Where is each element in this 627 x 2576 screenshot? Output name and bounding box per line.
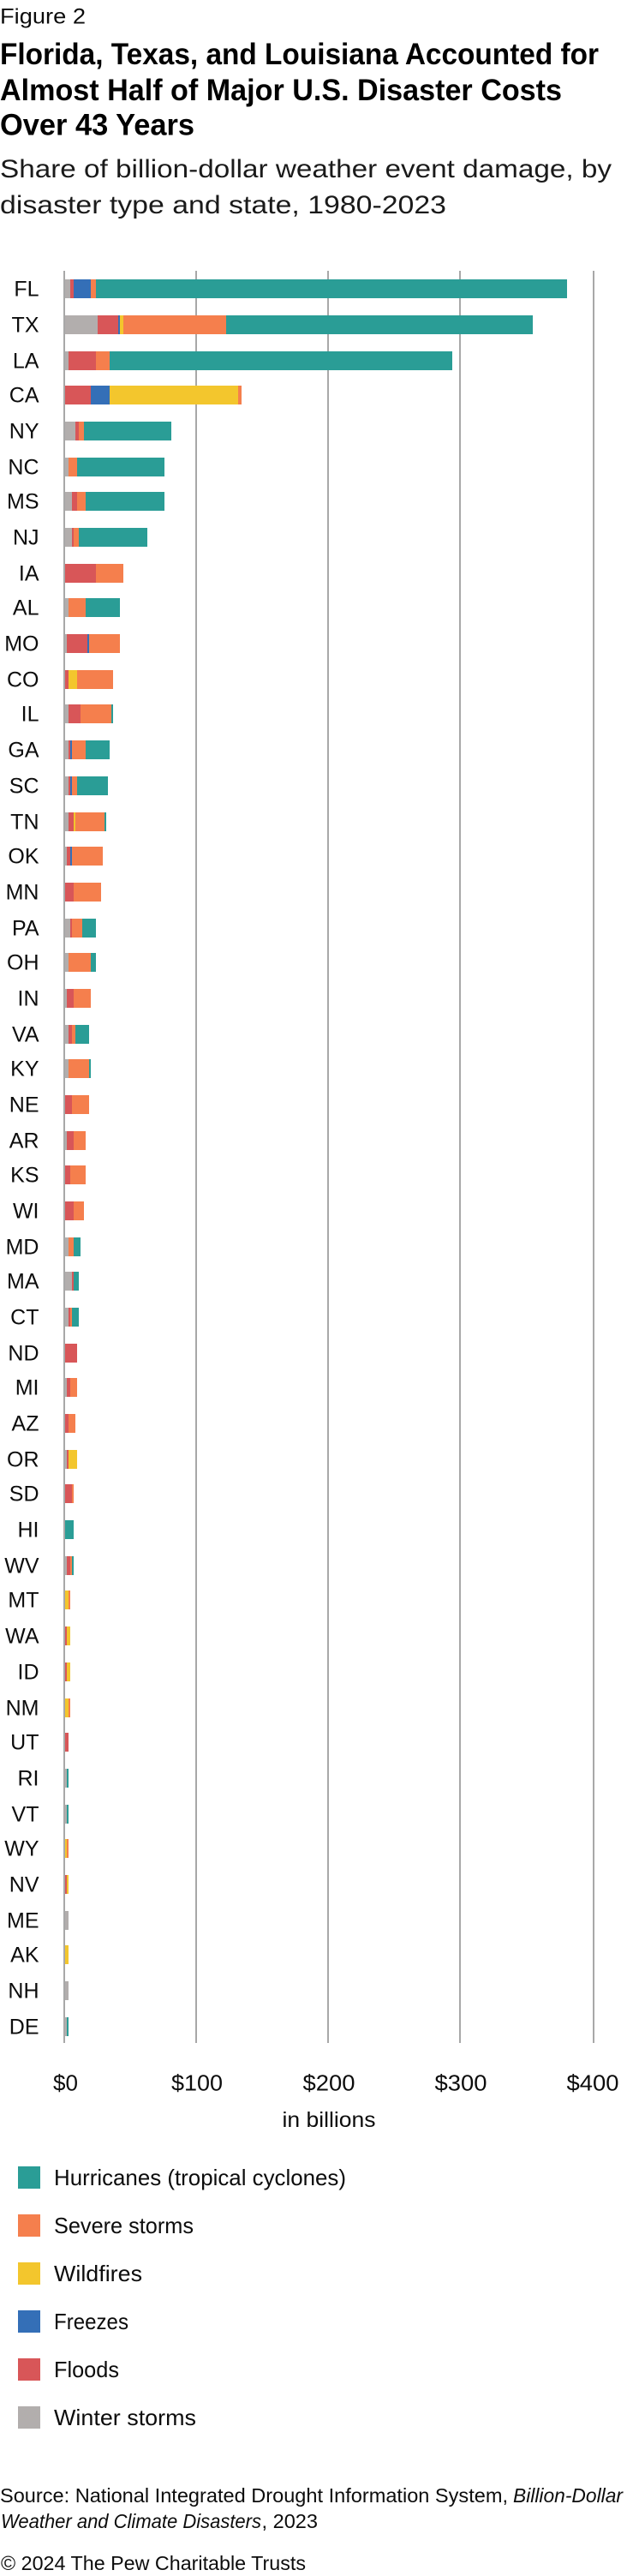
row: VT xyxy=(12,1803,69,1827)
row: FL: FL xyxy=(14,278,39,302)
row: TX xyxy=(12,314,533,338)
legend item: freezes: Freezes xyxy=(54,2309,128,2334)
row: NE: NE xyxy=(9,1093,39,1117)
row: OH xyxy=(7,951,96,975)
row: NE xyxy=(9,1093,89,1117)
row: AL: AL xyxy=(13,596,39,620)
row: NJ xyxy=(13,526,147,550)
row: NV: NV xyxy=(9,1873,39,1897)
row: AK: AK xyxy=(10,1944,39,1968)
subtitle xyxy=(0,155,612,219)
row: RI xyxy=(17,1767,69,1791)
row: AL xyxy=(13,596,120,620)
row: LA: LA xyxy=(13,350,39,374)
row: OK: OK xyxy=(8,845,39,869)
row: NY xyxy=(9,420,171,444)
legend item: floods: Floods xyxy=(54,2357,119,2382)
source note: , 2023 xyxy=(262,2510,318,2532)
subtitle: Share of billion-dollar weather event damage, by xyxy=(0,155,612,183)
x axis labels: $200 xyxy=(303,2070,355,2096)
row: KY: KY xyxy=(10,1057,39,1081)
row: KS: KS xyxy=(10,1164,39,1188)
row: NC: NC xyxy=(8,456,39,480)
x axis labels: $300 xyxy=(435,2070,487,2096)
source note: Weather and Climate Disasters xyxy=(1,2510,261,2532)
title xyxy=(0,38,599,142)
row: CO: CO xyxy=(7,668,39,692)
row: OR xyxy=(7,1448,77,1472)
stacked bar chart xyxy=(4,271,594,2043)
row: PA xyxy=(12,917,96,941)
row: TX: TX xyxy=(12,314,39,338)
row: ME xyxy=(7,1909,69,1933)
row: NC xyxy=(8,456,164,480)
row: MD xyxy=(6,1236,81,1260)
title: Florida, Texas, and Louisiana Accounted for xyxy=(0,38,599,71)
source note xyxy=(0,2484,624,2532)
row: SD: SD xyxy=(9,1483,39,1507)
row: CA: CA xyxy=(9,384,39,408)
row: SC: SC xyxy=(9,775,39,799)
row: NM: NM xyxy=(6,1697,39,1721)
row: MD: MD xyxy=(6,1236,39,1260)
row: TN xyxy=(10,811,106,835)
row: IL xyxy=(21,703,113,727)
row: AZ xyxy=(12,1412,75,1436)
title: Almost Half of Major U.S. Disaster Costs xyxy=(0,74,562,107)
x axis labels xyxy=(53,2070,618,2096)
row: GA: GA xyxy=(8,739,39,763)
row: WY xyxy=(4,1837,69,1861)
row: CA xyxy=(9,384,242,408)
row: AR: AR xyxy=(9,1129,39,1153)
legend item: wildfires xyxy=(18,2261,142,2286)
row: MN xyxy=(6,881,101,905)
row: DE: DE xyxy=(9,2016,39,2040)
row: NJ: NJ xyxy=(13,526,39,550)
row: MO xyxy=(4,632,120,656)
row: FL xyxy=(14,278,567,302)
row: KS xyxy=(10,1164,86,1188)
row: VT: VT xyxy=(12,1803,39,1827)
x axis title: in billions xyxy=(283,2108,375,2132)
row: UT xyxy=(10,1731,69,1755)
row: KY xyxy=(10,1057,91,1081)
row: MI: MI xyxy=(15,1376,39,1400)
row: ID xyxy=(17,1661,70,1685)
x axis labels: $100 xyxy=(171,2070,223,2096)
row: SC xyxy=(9,775,108,799)
row: HI xyxy=(17,1519,74,1543)
row: IA: IA xyxy=(19,562,39,586)
row: GA xyxy=(8,739,110,763)
row: MS xyxy=(7,490,164,514)
legend item: severe storms: Severe storms xyxy=(54,2213,194,2238)
row: AZ: AZ xyxy=(12,1412,39,1436)
row: ND: ND xyxy=(8,1342,39,1366)
row: CO xyxy=(7,668,113,692)
row: WY: WY xyxy=(4,1837,39,1861)
row: MS: MS xyxy=(7,490,39,514)
row: VA: VA xyxy=(12,1023,39,1047)
figure label: Figure 2 xyxy=(0,5,86,29)
row: TN: TN xyxy=(10,811,39,835)
row: ME: ME xyxy=(7,1909,39,1933)
row: ND xyxy=(8,1342,77,1366)
copyright: © 2024 The Pew Charitable Trusts xyxy=(1,2552,306,2574)
row: WV: WV xyxy=(4,1555,39,1579)
row: MI xyxy=(15,1376,77,1400)
source note: Source: National Integrated Drought Information System, xyxy=(0,2484,508,2507)
row: PA: PA xyxy=(12,917,39,941)
row: CT xyxy=(10,1306,79,1330)
row: AR xyxy=(9,1129,86,1153)
row: NV xyxy=(9,1873,69,1897)
row: DE xyxy=(9,2016,69,2040)
row: MN: MN xyxy=(6,881,39,905)
source note: Billion-Dollar xyxy=(513,2484,624,2507)
row: AK xyxy=(10,1944,69,1968)
row: NH xyxy=(8,1980,69,2004)
legend item: floods xyxy=(18,2357,119,2382)
legend item: wildfires: Wildfires xyxy=(54,2261,142,2286)
row: WI xyxy=(13,1200,84,1224)
title: Over 43 Years xyxy=(0,108,194,142)
row: IN: IN xyxy=(17,987,39,1011)
row: VA xyxy=(12,1023,89,1047)
legend item: winter storms: Winter storms xyxy=(54,2405,196,2430)
row: OR: OR xyxy=(7,1448,39,1472)
row: IN xyxy=(17,987,91,1011)
row: MT xyxy=(8,1589,70,1613)
row: RI: RI xyxy=(17,1767,39,1791)
row: MO: MO xyxy=(4,632,39,656)
row: WI: WI xyxy=(13,1200,39,1224)
row: MT: MT xyxy=(8,1589,39,1613)
row: UT: UT xyxy=(10,1731,39,1755)
x axis labels: $400 xyxy=(567,2070,618,2096)
legend xyxy=(18,2165,346,2430)
row: OH: OH xyxy=(7,951,39,975)
row: NM xyxy=(6,1697,70,1721)
row: IA xyxy=(19,562,123,586)
row: HI: HI xyxy=(17,1519,39,1543)
x axis labels: $0 xyxy=(53,2070,78,2096)
row: WA: WA xyxy=(5,1625,39,1649)
row: OK xyxy=(8,845,103,869)
row: NY: NY xyxy=(9,420,39,444)
row: IL: IL xyxy=(21,703,39,727)
row: SD xyxy=(9,1483,74,1507)
row: CT: CT xyxy=(10,1306,39,1330)
legend item: hurricanes: Hurricanes (tropical cyclones) xyxy=(54,2165,346,2190)
row: MA xyxy=(7,1270,79,1294)
row: ID: ID xyxy=(17,1661,39,1685)
row: NH: NH xyxy=(8,1980,39,2004)
row: WV xyxy=(4,1555,74,1579)
row: MA: MA xyxy=(7,1270,39,1294)
row: LA xyxy=(13,350,452,374)
gridlines xyxy=(63,271,594,2043)
legend item: freezes xyxy=(18,2309,128,2334)
subtitle: disaster type and state, 1980-2023 xyxy=(0,191,446,219)
row: WA xyxy=(5,1625,70,1649)
